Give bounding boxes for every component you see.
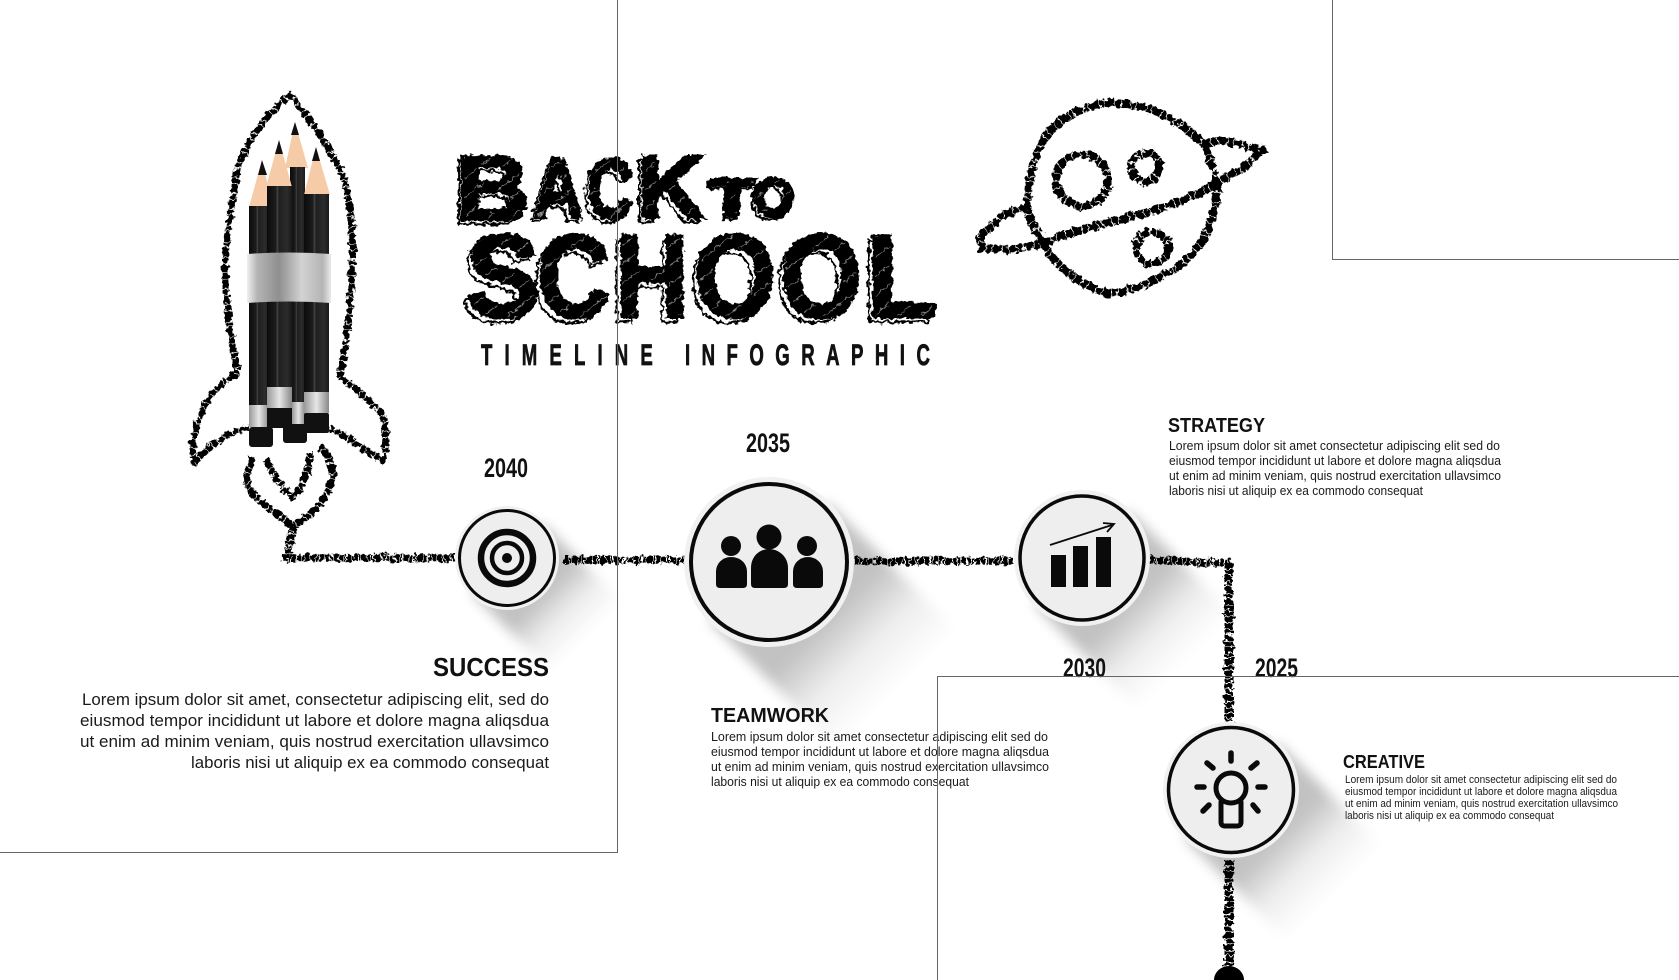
title outline layer: B xyxy=(452,142,528,244)
title outline layer: K xyxy=(633,142,701,242)
title: back to school xyxy=(452,138,938,348)
success heading: SUCCESS xyxy=(433,652,549,682)
node shadow xyxy=(1035,511,1232,708)
subtitle: timeline infographic xyxy=(481,339,930,372)
title outline layer: A xyxy=(529,146,579,240)
icon: bar chart with arrow xyxy=(1050,523,1114,587)
success body text xyxy=(80,690,550,772)
title outline layer xyxy=(452,142,931,348)
pencil 4 xyxy=(304,147,330,433)
node 2035: teamwork xyxy=(684,477,956,749)
title hatched layer: O xyxy=(753,168,795,228)
timeline scribble vertical xyxy=(1224,563,1234,968)
node 2040: success xyxy=(455,506,622,673)
success body text: ut enim ad minim veniam, quis nostrud exercitation ullavsimco xyxy=(80,732,549,751)
title hatched layer: S xyxy=(466,211,540,343)
subtitle: timeline infographic: INFOGRAPHIC xyxy=(685,339,930,372)
node shadow xyxy=(1184,743,1381,940)
node 2030: strategy xyxy=(1014,490,1232,708)
node disc xyxy=(455,506,559,610)
silver band xyxy=(247,252,331,303)
title hatched layer: C xyxy=(587,142,633,236)
creative body text: laboris nisi ut aliquip ex ea commodo consequat xyxy=(1345,810,1554,822)
title hatched layer xyxy=(456,138,938,343)
title hatched layer: O xyxy=(694,211,776,343)
strategy body text xyxy=(1169,439,1501,498)
teamwork body text: eiusmod tempor incididunt ut labore et dolore magna aliqsdua xyxy=(711,745,1049,759)
pencil 2 xyxy=(266,140,292,428)
year 2040: 2040 xyxy=(484,453,528,483)
title outline layer: S xyxy=(461,216,535,348)
title outline layer: O xyxy=(775,216,857,348)
title hatched layer: L xyxy=(866,211,938,343)
creative body text xyxy=(1345,774,1618,822)
node disc xyxy=(1014,490,1150,626)
pencil 3 xyxy=(283,122,308,443)
title hatched layer: O xyxy=(780,211,862,343)
subtitle: timeline infographic: TIMELINE xyxy=(481,339,653,372)
title hatched layer: B xyxy=(456,138,530,240)
node 2025: creative xyxy=(1163,722,1381,940)
creative body text: Lorem ipsum dolor sit amet consectetur adipiscing elit sed do xyxy=(1345,774,1617,786)
timeline end cap xyxy=(1214,966,1244,980)
title hatched layer: T xyxy=(711,168,755,228)
icon: target xyxy=(481,532,533,584)
node disc xyxy=(1163,722,1299,858)
strategy body text: eiusmod tempor incididunt ut labore et dolore magna aliqsdua xyxy=(1169,454,1501,468)
title hatched layer: K xyxy=(637,138,705,238)
node disc xyxy=(684,477,854,647)
pencil 1 xyxy=(249,160,273,447)
strategy body text: Lorem ipsum dolor sit amet consectetur adipiscing elit sed do xyxy=(1169,439,1500,453)
strategy heading: STRATEGY xyxy=(1168,415,1266,437)
creative body text: eiusmod tempor incididunt ut labore et dolore magna aliqsdua xyxy=(1345,786,1618,798)
creative heading: CREATIVE xyxy=(1343,752,1425,772)
success body text: Lorem ipsum dolor sit amet, consectetur adipiscing elit, sed do xyxy=(82,690,549,709)
year 2035: 2035 xyxy=(746,428,790,458)
strategy body text: ut enim ad minim veniam, quis nostrud exercitation ullavsimco xyxy=(1169,469,1501,483)
rocket made of pencils xyxy=(247,122,331,447)
title outline layer: O xyxy=(750,171,792,231)
icon: light bulb xyxy=(1197,753,1265,826)
planet sketch xyxy=(980,103,1262,293)
teamwork body text xyxy=(711,730,1049,789)
teamwork body text: ut enim ad minim veniam, quis nostrud exercitation ullavsimco xyxy=(711,760,1049,774)
teamwork body text: laboris nisi ut aliquip ex ea commodo consequat xyxy=(711,775,969,789)
title outline layer: C xyxy=(532,216,606,348)
icon: people xyxy=(716,524,823,588)
node shadow xyxy=(472,523,622,673)
teamwork body text: Lorem ipsum dolor sit amet consectetur adipiscing elit sed do xyxy=(711,730,1048,744)
node shadow xyxy=(710,503,956,749)
year 2025: 2025 xyxy=(1255,653,1298,683)
title hatched layer: A xyxy=(533,142,583,236)
success body text: laboris nisi ut aliquip ex ea commodo consequat xyxy=(191,753,549,772)
rocket flame sketch xyxy=(247,447,333,527)
teamwork heading: TEAMWORK xyxy=(711,705,830,727)
strategy body text: laboris nisi ut aliquip ex ea commodo consequat xyxy=(1169,484,1423,498)
year 2030: 2030 xyxy=(1063,653,1106,683)
creative body text: ut enim ad minim veniam, quis nostrud exercitation ullavsimco xyxy=(1345,798,1618,810)
title outline layer: H xyxy=(610,216,684,348)
timeline scribble path xyxy=(287,527,1230,563)
title hatched layer: H xyxy=(615,211,689,343)
title outline layer: O xyxy=(689,216,771,348)
title outline layer: L xyxy=(861,216,931,348)
title hatched layer: C xyxy=(537,211,611,343)
success body text: eiusmod tempor incididunt ut labore et dolore magna aliqsdua xyxy=(80,711,550,730)
title outline layer: C xyxy=(583,146,629,240)
title outline layer: T xyxy=(708,171,752,231)
rocket sketch outline xyxy=(193,95,386,463)
